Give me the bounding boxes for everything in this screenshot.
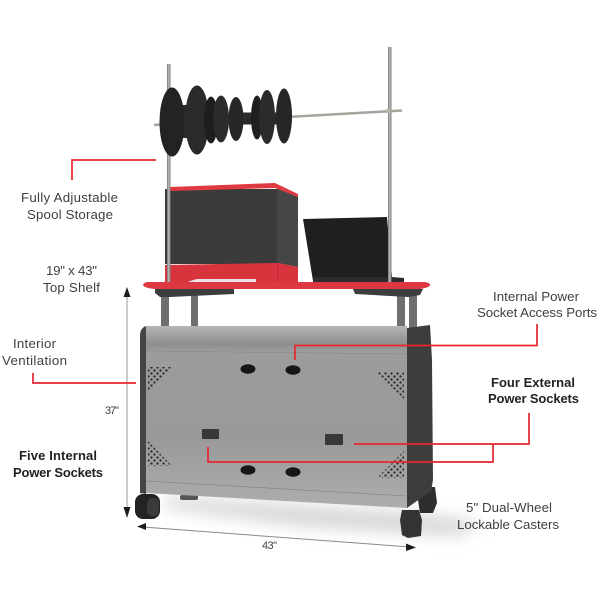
label: spool storage: Fully Adjustable — [21, 190, 118, 205]
label: casters: 5" Dual-Wheel — [466, 500, 552, 515]
callout line: internal sockets — [208, 444, 493, 462]
callout line: external sockets — [354, 413, 529, 444]
top shelf — [143, 282, 430, 289]
floor shadow — [165, 497, 480, 536]
label: spool storage — [21, 190, 118, 222]
rear right caster — [418, 487, 437, 513]
access ports — [240, 364, 300, 477]
cabinet — [140, 325, 433, 508]
support legs — [161, 292, 417, 328]
printer red base — [165, 263, 298, 282]
3D printer — [165, 183, 298, 282]
printer dark body — [165, 189, 278, 264]
ventilation holes — [148, 367, 404, 478]
label: casters — [457, 500, 559, 532]
label: height: 37" — [105, 405, 119, 417]
label: interior ventilation: Interior — [13, 336, 57, 351]
label: top shelf: Top Shelf — [43, 280, 100, 295]
label: four external sockets: Four External — [491, 375, 575, 390]
label: four external sockets — [488, 375, 579, 406]
spool rack — [154, 47, 402, 296]
label: five internal sockets: Five Internal — [19, 448, 97, 463]
shelf brackets — [155, 289, 423, 297]
callout line: spool storage — [72, 160, 156, 180]
callout line: ventilation — [33, 373, 136, 383]
label: top shelf: 19" x 43" — [46, 263, 97, 278]
label: access ports: Socket Access Ports — [477, 305, 597, 320]
callout line: access ports — [295, 324, 537, 360]
spools — [160, 86, 292, 156]
printer base vents — [188, 279, 256, 282]
printer red lid — [170, 183, 298, 197]
label: five internal sockets — [13, 448, 103, 480]
height dimension arrow — [124, 287, 130, 518]
front left caster — [135, 494, 160, 519]
cabinet front panel — [146, 326, 407, 508]
crossbar joint — [386, 108, 390, 114]
label: spool storage: Spool Storage — [27, 207, 113, 222]
label: width: 43" — [262, 540, 277, 552]
right pole — [388, 47, 392, 296]
label: top shelf — [43, 263, 100, 295]
label: access ports — [477, 289, 597, 320]
cabinet left side — [140, 326, 146, 494]
width dimension arrow — [137, 523, 416, 551]
label: five internal sockets: Power Sockets — [13, 465, 103, 480]
cabinet right side — [407, 325, 433, 508]
label: casters: Lockable Casters — [457, 517, 559, 532]
label: access ports: Internal Power — [493, 289, 580, 304]
laptop — [303, 217, 404, 283]
power sockets — [202, 429, 343, 445]
crossbar — [154, 110, 402, 125]
left pole — [167, 64, 170, 296]
front right caster — [400, 510, 422, 538]
label: interior ventilation: Ventilation — [2, 353, 67, 368]
label: four external sockets: Power Sockets — [488, 391, 579, 406]
small centre wheel — [180, 495, 198, 500]
label: interior ventilation — [2, 336, 67, 368]
